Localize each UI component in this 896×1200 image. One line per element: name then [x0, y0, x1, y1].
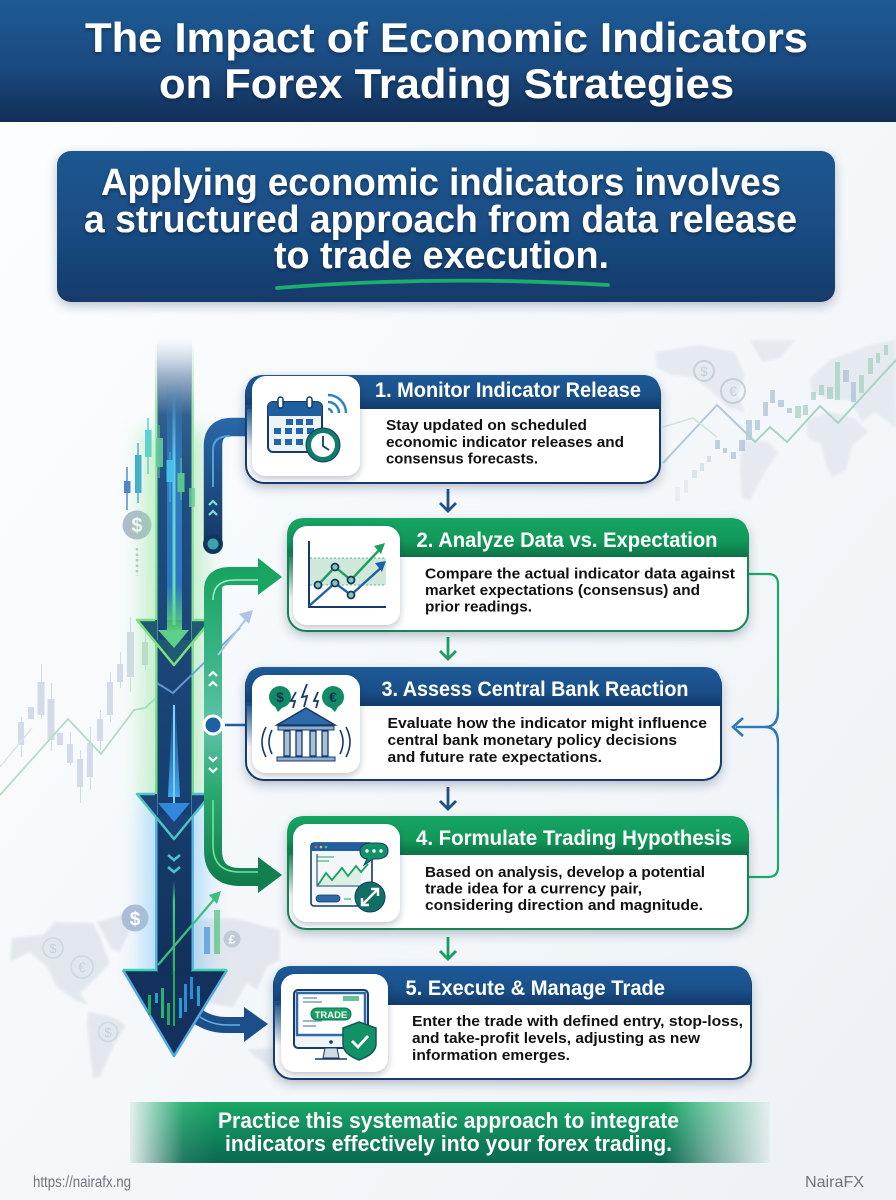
card 2 title: 2. Analyze Data vs. Expectation [416, 529, 718, 552]
faint coins: $ [49, 941, 57, 956]
icon: data vs expectation chart [309, 541, 386, 607]
card 4 body [425, 864, 705, 914]
card 1 body [386, 417, 624, 468]
card 5 left edge fade [274, 1001, 284, 1046]
coin and candles at top of main arrow [122, 418, 152, 576]
card 1: Monitor Indicator Release [246, 375, 660, 483]
left candles and trend line [0, 617, 157, 803]
card 4 title: 4. Formulate Trading Hypothesis [416, 827, 732, 850]
card 4 left edge fade [287, 851, 297, 896]
connector: step 1 to timeline [203, 427, 250, 554]
card 1 left edge fade [246, 405, 256, 450]
card 3 header [246, 667, 721, 706]
card 2 icon tile [293, 526, 400, 625]
faint coins [43, 938, 118, 1042]
icon: dollar coin [122, 510, 152, 540]
title [85, 14, 808, 107]
arrowhead 1 [137, 620, 211, 665]
card 5 body: Enter the trade with defined entry, stop-loss, [412, 1013, 743, 1030]
card 2 header [287, 518, 748, 557]
card 1 header [246, 375, 660, 409]
connector arrow to step 5 [197, 1007, 268, 1042]
subtitle text: Applying economic indicators involves [101, 162, 781, 204]
card 4: Formulate Trading Hypothesis [287, 816, 748, 929]
icon: trade monitor and shield: TRADE [315, 1010, 347, 1021]
small trend elements near arrow [43, 891, 240, 1042]
right side feedback connector [733, 574, 778, 877]
card 5 icon tile [281, 974, 388, 1072]
bottom call to action band [130, 1102, 770, 1163]
card 4 body: trade idea for a currency pair, [425, 880, 642, 898]
icon: central bank [262, 684, 350, 761]
icon: central bank: € [329, 689, 337, 705]
card 2 body: market expectations (consensus) and [425, 582, 700, 599]
card 2 body: prior readings. [425, 598, 532, 616]
coin and candles at top of main arrow: $ [131, 515, 143, 537]
glow [142, 430, 206, 800]
header band [0, 0, 896, 122]
small trend elements near arrow: $ [130, 909, 141, 930]
card 4 body: Based on analysis, develop a potential [425, 864, 705, 881]
title: on Forex Trading Strategies [159, 60, 734, 107]
card 2 body: Compare the actual indicator data against [425, 566, 735, 582]
icon: central bank: $ [276, 689, 284, 705]
connector: steps 2 and 4 branch arrows [202, 558, 282, 893]
call to action text [218, 1108, 679, 1156]
icon: dollar coin lower [122, 904, 148, 932]
main arrow [123, 338, 240, 1056]
node: step 3 link [225, 724, 248, 726]
centre light beam [167, 380, 182, 620]
footer brand: NairaFX [805, 1174, 864, 1191]
card 4 body: considering direction and magnitude. [425, 897, 703, 914]
subtitle text: to trade execution. [274, 235, 609, 277]
card 5 body: and take-profit levels, adjusting as new [412, 1030, 700, 1047]
card 3 left edge fade [246, 702, 256, 747]
card 5: Execute and Manage Trade [274, 966, 751, 1079]
card 4 icon tile [293, 824, 400, 922]
subtitle text [84, 162, 797, 277]
card 1 body: economic indicator releases and [386, 434, 624, 451]
arrow: rising trend [218, 610, 253, 655]
card 5 body [412, 1013, 743, 1064]
card 3 title: 3. Assess Central Bank Reaction [382, 678, 688, 701]
card 3 body [388, 715, 707, 766]
candles in arrowhead [148, 971, 200, 1026]
arrowhead 3 [123, 970, 227, 1056]
card 5 body: information emerges. [412, 1047, 570, 1064]
icon: trading hypothesis window [311, 843, 388, 912]
line chart: top right [663, 360, 896, 463]
world map backdrop: top right [655, 340, 896, 500]
chevrons [168, 855, 180, 872]
call to action text: indicators effectively into your forex trading. [225, 1131, 672, 1156]
card 2 left edge fade [287, 553, 297, 598]
faint coins: $ [104, 1025, 112, 1040]
arrowhead into step 3 [733, 718, 743, 736]
arrow to step 2 [258, 558, 282, 595]
card 1 body: Stay updated on scheduled [386, 417, 587, 434]
candlesticks: top right [675, 345, 888, 501]
card 1 title: 1. Monitor Indicator Release [375, 379, 641, 402]
faint coins: € [78, 959, 86, 975]
card 2: Analyze Data vs. Expectation [287, 518, 748, 631]
shaft [157, 338, 192, 988]
world map backdrop: bottom left [10, 912, 280, 1078]
arrowhead 2 [137, 794, 211, 839]
title: The Impact of Economic Indicators [85, 14, 808, 61]
card 3 body: central bank monetary policy decisions [388, 732, 677, 749]
card 5 title: 5. Execute & Manage Trade [406, 977, 665, 1000]
currency coins: top right [694, 361, 745, 403]
card 3 icon tile [252, 675, 360, 773]
card 5 header [274, 966, 751, 1005]
currency coins: top right: € [729, 383, 737, 399]
card 1 icon tile [252, 376, 360, 476]
card 3: Assess Central Bank Reaction [246, 667, 721, 780]
card 3 body: Evaluate how the indicator might influence [388, 715, 707, 732]
shaft beam 2 [168, 700, 180, 797]
currency coins: top right: $ [700, 364, 708, 379]
footer url: https://nairafx.ng [33, 1174, 131, 1191]
arrow to step 4 [258, 857, 282, 893]
card 1 body: consensus forecasts. [386, 450, 538, 468]
small trend elements near arrow: £ [229, 932, 236, 946]
candles over shaft [156, 425, 195, 507]
card 4 header [287, 816, 748, 855]
icon: calendar with clock [268, 395, 346, 462]
card 3 body: and future rate expectations. [388, 749, 602, 766]
subtitle panel [57, 151, 835, 302]
call to action text: Practice this systematic approach to integrate [218, 1108, 679, 1133]
icon: pound coin [224, 930, 240, 948]
subtitle text: a structured approach from data release [84, 199, 797, 241]
trend line crossing shaft [157, 628, 240, 693]
card 2 body [425, 566, 735, 616]
step down arrows [440, 489, 456, 959]
green underline [277, 281, 608, 288]
